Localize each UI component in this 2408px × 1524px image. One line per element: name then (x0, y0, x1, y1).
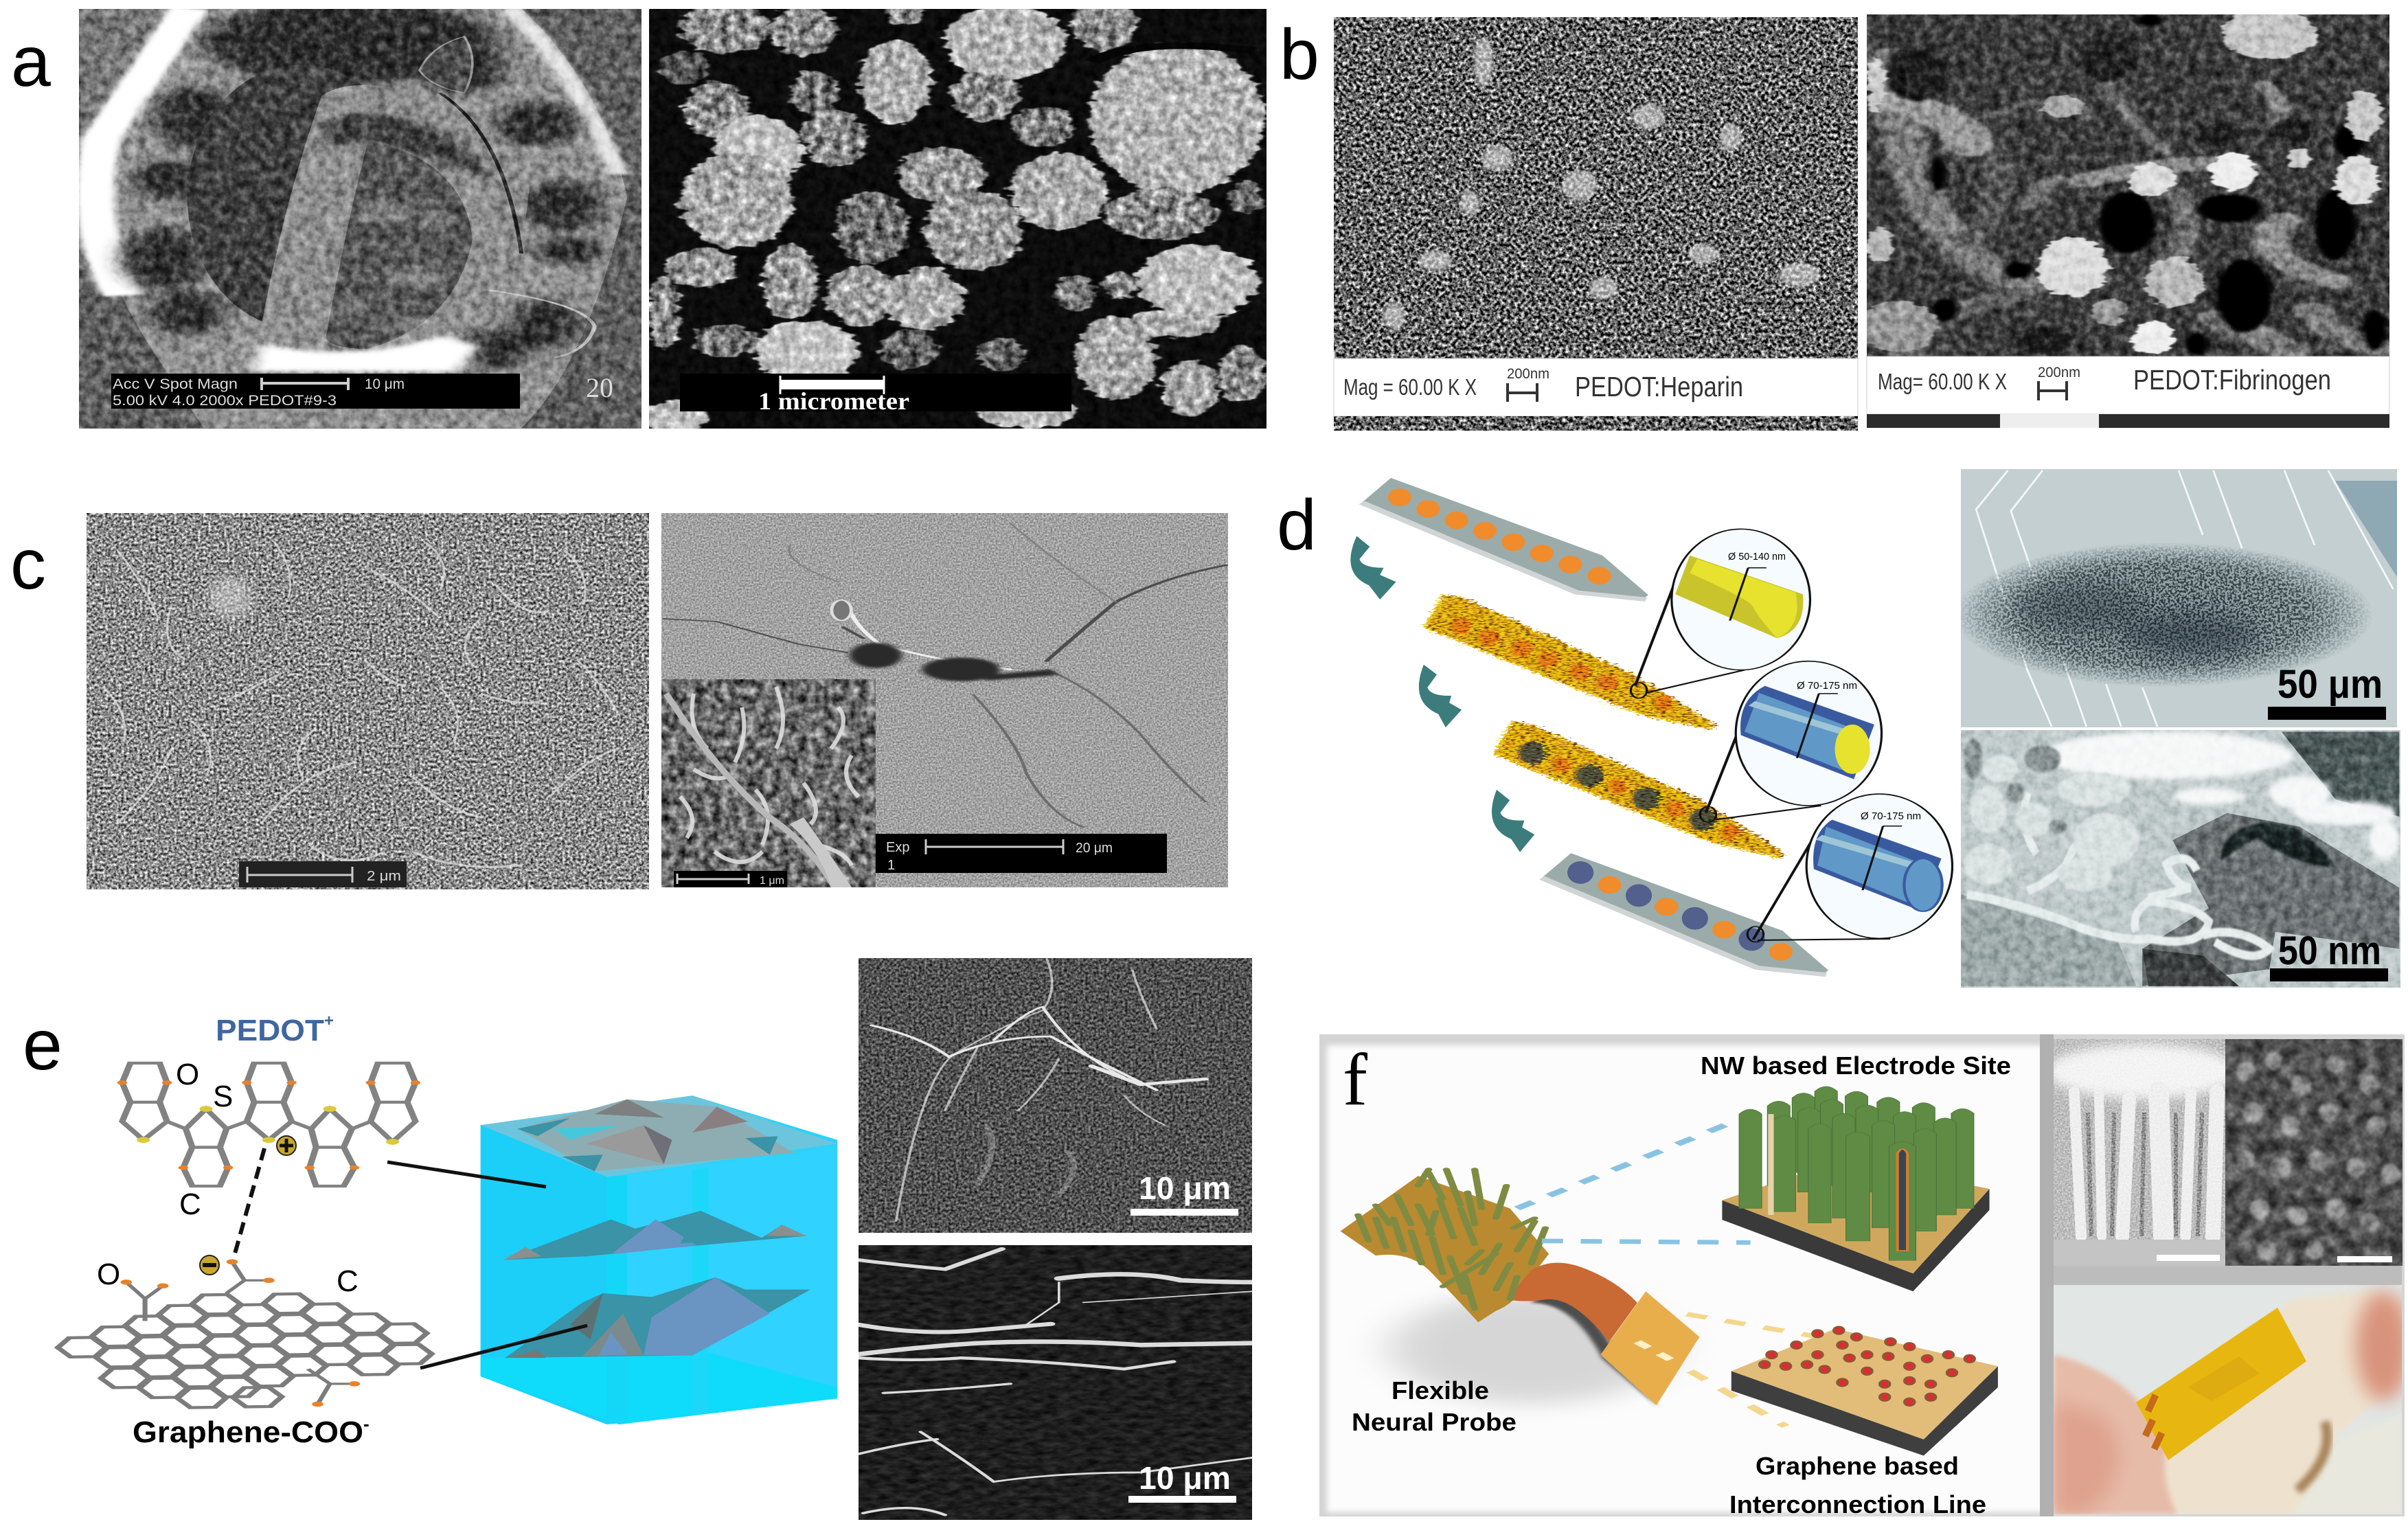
panel f: Interconnection Line (1729, 1490, 1986, 1519)
info bar: 5.00 kV 4.0 2000x PEDOT#9-3 (113, 393, 337, 409)
SEM image: neuron on film with inset (661, 513, 1228, 887)
panel e (23, 958, 1252, 1520)
composite block schematic (481, 1095, 837, 1424)
label f: f (1343, 1039, 1367, 1121)
zoom callout: nanotube: Ø 70-175 nm (1861, 810, 1921, 822)
panel d (1277, 469, 2400, 988)
shank 2: fibres (1424, 595, 1716, 730)
scale: 10 µm (bottom): 10 μm (1139, 1460, 1231, 1496)
info bar: Acc V Spot Magn (113, 376, 238, 392)
flexible probe illustration: Flexible (1392, 1376, 1489, 1404)
panel a (11, 0, 1267, 433)
zoom callout: coated fibre (1706, 661, 1882, 820)
caption band: fibrinogen: Mag= 60.00 K X (1878, 369, 2007, 394)
label e: e (23, 1005, 63, 1085)
frame (1319, 1034, 2405, 1516)
zoom callout: coated fibre: Ø 70-175 nm (1797, 680, 1857, 692)
info bar: 10 μm (365, 376, 405, 392)
ionic interaction (200, 1136, 296, 1275)
PEDOT molecule: PEDOT (216, 1014, 324, 1047)
graphene sheet (52, 1258, 438, 1449)
SEM image: nanofibrous film (87, 513, 649, 889)
zoom callout: nanotube (1753, 794, 1953, 940)
SEM image: nanowires side view (2047, 1039, 2239, 1266)
graphene sheet: Graphene-COO (133, 1415, 363, 1449)
label b: b (1280, 15, 1319, 95)
scale bar: 20 µm: 1 (887, 858, 895, 873)
panel f (1319, 1034, 2408, 1519)
PEDOT molecule: C (179, 1187, 201, 1221)
SEM image: coated ring electrode (79, 0, 641, 429)
scale: 50 µm (2268, 662, 2386, 720)
scale bar: 1 micrometer (758, 387, 909, 415)
photo: flexible probe held between fingers (2054, 1285, 2408, 1514)
graphene sheet: C (337, 1264, 359, 1298)
panel f: Graphene based (1756, 1452, 1959, 1480)
caption band: heparin: PEDOT:Heparin (1575, 371, 1743, 402)
SEM image: electrode site (1961, 469, 2397, 727)
flexible probe illustration (1340, 1121, 1828, 1436)
graphene sheet: - (363, 1413, 370, 1434)
scale bar: 20 µm: 20 μm (1076, 841, 1113, 856)
caption band: heparin: 200nm (1507, 366, 1549, 382)
SEM image: PEDOT:Heparin (1334, 17, 1858, 359)
caption band: fibrinogen (1867, 356, 2389, 428)
schematic: fabrication steps (1350, 478, 1953, 975)
PEDOT molecule: O (176, 1058, 199, 1091)
inset: close-up (661, 679, 876, 887)
info bar (111, 374, 520, 409)
SEM image: PEDOT nodules (644, 0, 1267, 433)
SEM image: aligned wrinkles (859, 1245, 1252, 1520)
SEM image: wrinkled sheet (859, 958, 1252, 1233)
image number: 20 (586, 372, 613, 403)
panel b (1280, 8, 2389, 431)
headings: NW based Electrode Site (1701, 1051, 2011, 1080)
scale bar: 2 µm: 2 μm (367, 869, 401, 884)
leader lines (387, 1162, 587, 1368)
scale bar: 1 µm (674, 871, 787, 887)
zoom callout: PEDOT-free fibre: Ø 50-140 nm (1728, 551, 1786, 562)
SEM image: PEDOT:Fibrinogen (1858, 8, 2389, 356)
scale: 10 µm (top): 10 μm (1139, 1170, 1231, 1206)
SEM image: nanotube wall (1961, 730, 2400, 988)
scale bar: 20 µm: Exp (886, 840, 909, 855)
label c: c (10, 525, 46, 604)
flexible probe illustration: Neural Probe (1352, 1408, 1517, 1436)
scale: 50 nm: 50 nm (2278, 929, 2381, 973)
caption band: heparin (1334, 359, 1858, 431)
PEDOT molecule (117, 1012, 420, 1221)
shank 4: nanotubes (1542, 853, 1828, 975)
scale bar (680, 374, 1071, 415)
scale: 50 µm: 50 μm (2278, 662, 2383, 707)
PEDOT molecule: + (324, 1012, 334, 1030)
graphene interconnect block (1731, 1326, 1998, 1455)
scale: 10 µm (top) (1131, 1170, 1238, 1216)
label a: a (11, 22, 51, 102)
caption band: fibrinogen: 200nm (2038, 365, 2080, 380)
label d: d (1277, 486, 1317, 565)
scale bar: 1 µm: 1 μm (760, 875, 784, 887)
panel c (10, 513, 1228, 889)
PEDOT molecule: S (213, 1080, 233, 1113)
scale bar: 20 µm (876, 834, 1167, 873)
shank 1: bare probe (1362, 478, 1648, 600)
graphene sheet: O (97, 1258, 120, 1291)
caption band: heparin: Mag = 60.00 K X (1343, 374, 1477, 400)
scale bar: 2 µm (239, 861, 407, 887)
SEM image: nanowires top view (2225, 1039, 2403, 1266)
nanowire electrode site (1722, 1087, 1990, 1291)
process arrows (1350, 536, 1534, 852)
zoom callout: PEDOT-free fibre (1635, 529, 1810, 693)
shank 3: coated fibres (1493, 722, 1784, 858)
caption band: fibrinogen: PEDOT:Fibrinogen (2133, 364, 2331, 396)
